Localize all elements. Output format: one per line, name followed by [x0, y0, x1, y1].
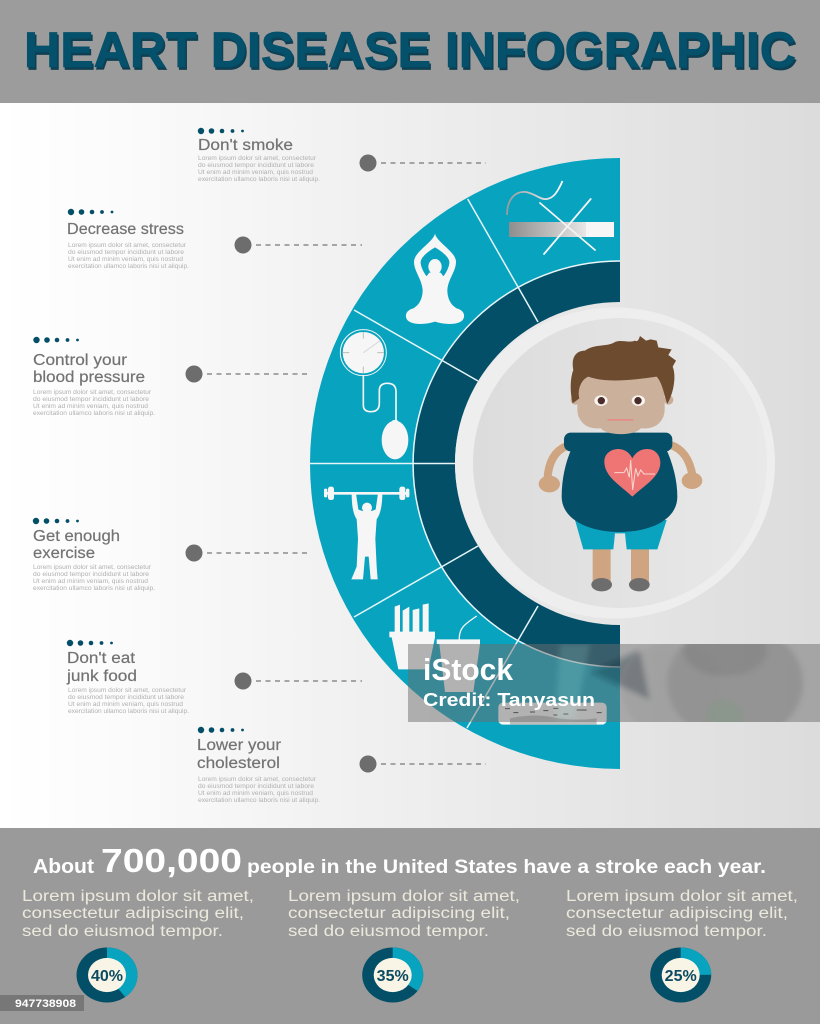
heading: Decrease stress [67, 221, 184, 238]
column text 2: sed do eiusmod tempor. [288, 923, 489, 940]
image id tag [0, 995, 84, 1011]
body text: Ut enim ad minim veniam, quis nostrud [33, 403, 148, 410]
arms [539, 445, 702, 492]
column text 2: Lorem ipsum dolor sit amet, [288, 888, 520, 905]
body text: exercitation ullamco laboris nisi ut aliquip. [198, 797, 320, 804]
body text: do eiusmod tempor incididunt ut labore [33, 396, 149, 403]
headline statistic: About [33, 856, 94, 878]
centre gap [455, 302, 785, 625]
ears and head [571, 370, 673, 434]
donut 25%: 25% [665, 968, 697, 985]
column text 1: Lorem ipsum dolor sit amet, [22, 888, 254, 905]
column text 3 [566, 888, 798, 940]
progress dots [33, 337, 79, 343]
item: don't eat junk food [66, 640, 362, 715]
donut 40% [76, 948, 138, 1002]
heading: Don't eat [67, 650, 136, 667]
body text: Ut enim ad minim veniam, quis nostrud [68, 701, 183, 708]
watermark logo: iStock [423, 652, 514, 687]
main panel background [0, 103, 820, 828]
heading: cholesterol [197, 755, 280, 772]
body text [68, 687, 189, 715]
progress dots [67, 640, 113, 646]
heading [33, 352, 145, 386]
column text 1 [22, 888, 254, 940]
body text: do eiusmod tempor incididunt ut labore [198, 783, 314, 790]
white ring around character [455, 308, 775, 618]
connector [186, 544, 310, 562]
icon: yoga meditation [406, 233, 464, 324]
headline statistic: people in the United States have a stroke each year. [247, 857, 766, 878]
header band [0, 0, 820, 102]
body text: Lorem ipsum dolor sit amet, consectetur [198, 155, 317, 162]
headline statistic [33, 842, 766, 879]
heading: Control your [33, 352, 127, 369]
watermark credit: Credit: Tanyasun [423, 690, 595, 710]
column text 3: sed do eiusmod tempor. [566, 923, 767, 940]
body text: Lorem ipsum dolor sit amet, consectetur [198, 776, 317, 783]
eyes [594, 395, 645, 406]
connector [360, 756, 486, 772]
column text 3: consectetur adipiscing elit, [566, 905, 788, 922]
shirt [562, 433, 677, 532]
watermark band [408, 644, 820, 722]
column text 1: sed do eiusmod tempor. [22, 923, 223, 940]
item: don't smoke [198, 128, 486, 183]
mouth [607, 419, 633, 421]
body text: Lorem ipsum dolor sit amet, consectetur [33, 564, 152, 571]
heading [66, 650, 137, 685]
progress dots [198, 128, 244, 134]
body text [33, 389, 155, 417]
title: HEART DISEASE INFOGRAPHIC [24, 22, 796, 78]
icon: burger [498, 703, 607, 725]
headline statistic: 700,000 [101, 842, 242, 879]
body text: do eiusmod tempor incididunt ut labore [68, 694, 184, 701]
body text [198, 776, 320, 804]
connector [234, 672, 362, 690]
body text: do eiusmod tempor incididunt ut labore [68, 249, 184, 256]
body text: do eiusmod tempor incididunt ut labore [198, 162, 314, 169]
body text [68, 242, 189, 270]
body text: Lorem ipsum dolor sit amet, consectetur [68, 687, 187, 694]
item: lower your cholesterol [197, 727, 486, 804]
connector [186, 366, 310, 382]
body text: Ut enim ad minim veniam, quis nostrud [198, 169, 313, 176]
body text: exercitation ullamco laboris nisi ut aliquip. [68, 708, 189, 715]
outer teal half ring [310, 158, 620, 769]
body text: exercitation ullamco laboris nisi ut aliquip. [33, 585, 155, 592]
progress dots [33, 518, 79, 524]
item: decrease stress [67, 209, 362, 270]
heading: blood pressure [33, 369, 145, 386]
heading [197, 737, 281, 772]
column text 2 [288, 888, 520, 940]
item: control your blood pressure [33, 337, 310, 417]
icon: fries and drink [389, 603, 480, 692]
footer panel [0, 828, 820, 1024]
image id tag: 947738908 [15, 998, 76, 1010]
body text: exercitation ullamco laboris nisi ut aliquip. [198, 176, 320, 183]
legs and shoes [591, 543, 650, 591]
body text: Ut enim ad minim veniam, quis nostrud [68, 256, 183, 263]
body text: Ut enim ad minim veniam, quis nostrud [198, 790, 313, 797]
body text: Lorem ipsum dolor sit amet, consectetur [33, 389, 152, 396]
heading: junk food [66, 668, 137, 685]
connector [234, 236, 362, 254]
body text: Lorem ipsum dolor sit amet, consectetur [68, 242, 187, 249]
body text [198, 155, 320, 183]
donut 40%: 40% [91, 968, 123, 985]
heading: Lower your [197, 737, 281, 754]
column text 1: consectetur adipiscing elit, [22, 905, 244, 922]
dark inner half ring [413, 261, 620, 667]
body text [33, 564, 155, 592]
column text 2: consectetur adipiscing elit, [288, 905, 510, 922]
body text: Ut enim ad minim veniam, quis nostrud [33, 578, 148, 585]
connector [360, 154, 486, 172]
icon: blood pressure gauge [340, 330, 408, 459]
semicircle diagram [310, 158, 785, 769]
hair [571, 336, 676, 404]
progress dots [68, 209, 113, 215]
progress dots [198, 727, 244, 733]
character: overweight boy with heart [539, 336, 702, 591]
inner grey disc [473, 318, 767, 608]
item: get enough exercise [33, 518, 310, 592]
segment dividers [310, 199, 538, 728]
heading: Don't smoke [198, 137, 293, 154]
heading [33, 528, 120, 562]
body text: exercitation ullamco laboris nisi ut aliquip. [68, 263, 189, 270]
heart with pulse line [604, 449, 660, 497]
donut 35% [362, 948, 423, 1002]
title: HEART DISEASE INFOGRAPHIC [26, 24, 798, 80]
donut 25% [650, 948, 711, 1002]
body text: exercitation ullamco laboris nisi ut aliquip. [33, 410, 155, 417]
column text 3: Lorem ipsum dolor sit amet, [566, 888, 798, 905]
donut 35%: 35% [377, 968, 409, 985]
icon: weightlifter [324, 487, 409, 579]
heading: exercise [33, 545, 95, 562]
body text: do eiusmod tempor incididunt ut labore [33, 571, 149, 578]
ring outline [413, 261, 620, 667]
heading: Get enough [33, 528, 120, 545]
shorts [575, 520, 667, 549]
icon: cigarette crossed out [507, 181, 614, 254]
